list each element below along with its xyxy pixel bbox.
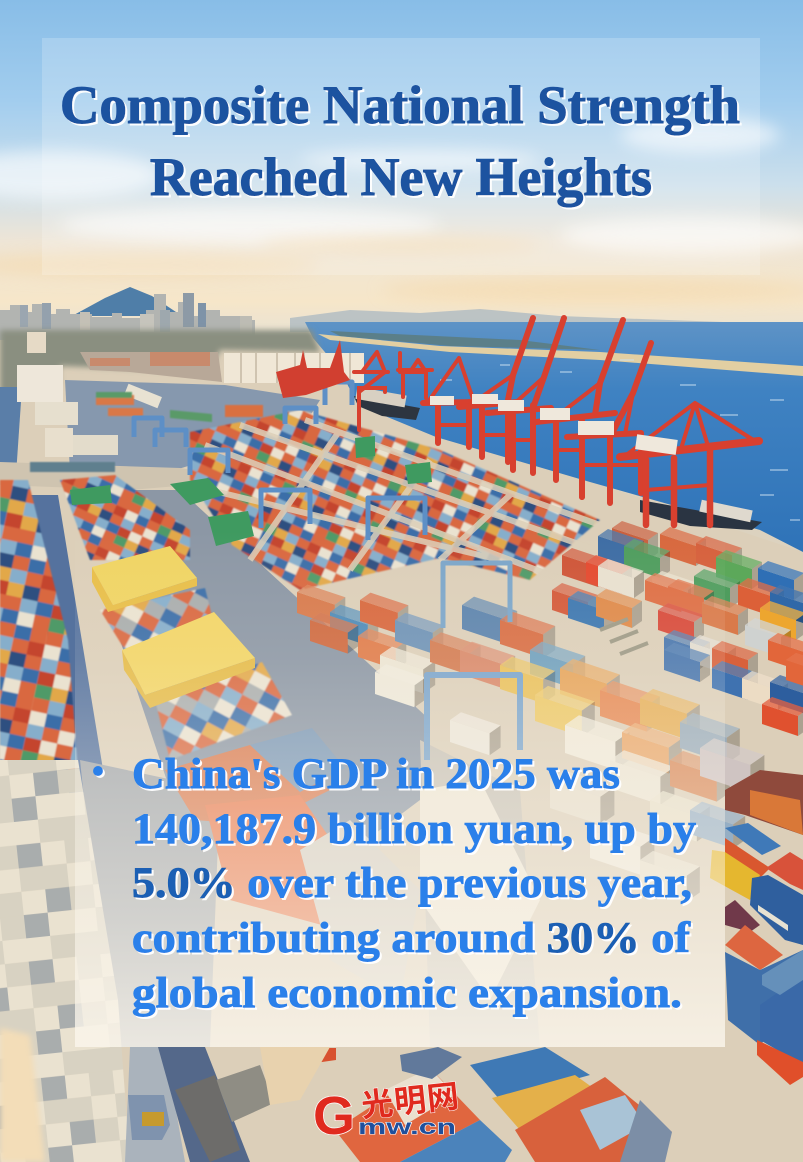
left stacks [60, 475, 292, 760]
title [60, 75, 740, 207]
body text block: China's GDP in 2025 was [132, 751, 620, 798]
blue yard gantries [134, 382, 520, 760]
crane 3 [536, 320, 623, 497]
body text block: 5.0% over the previous year, [132, 860, 692, 907]
city skyline [0, 293, 255, 352]
central containers as individual boxes [297, 585, 764, 902]
lower centre stacks [165, 728, 540, 1000]
panel: title backdrop [42, 38, 760, 275]
red quay cranes [354, 318, 759, 525]
sea wave highlights [440, 360, 800, 520]
crane 5 [459, 318, 533, 462]
road grey asphalt areas [28, 490, 540, 1047]
mountain [72, 287, 182, 316]
parking lines [600, 619, 648, 654]
logo red G: G [313, 1086, 355, 1146]
distant hills [290, 309, 803, 332]
right block containers [552, 521, 803, 736]
body text block [94, 751, 697, 1017]
right edge containers [710, 770, 803, 1085]
sea [305, 322, 803, 552]
harbour buildings [17, 332, 364, 457]
left pale container column [0, 760, 130, 1162]
body text block: 140,187.9 billion yuan, up by [132, 806, 697, 853]
crane 6 [423, 358, 477, 447]
ground [0, 340, 803, 1162]
green containers [70, 436, 432, 546]
crane 4 [487, 318, 564, 473]
clouds [0, 117, 803, 253]
title: Composite National Strength [60, 75, 740, 135]
crane 2 [567, 343, 651, 503]
inland roads [0, 380, 320, 490]
yellow warehouse blocks [92, 546, 255, 708]
left colourful container column [0, 480, 78, 770]
yard clutter at upper left [30, 392, 311, 472]
logo: gmw.cn [313, 1078, 461, 1146]
body text block: contributing around 30% of [132, 915, 691, 962]
crane cabins [430, 394, 678, 455]
container yard upper rows [190, 410, 600, 590]
logo Chinese name: 光明网 [359, 1078, 461, 1124]
crane 1 [620, 403, 759, 525]
bottom centre containers [125, 1047, 672, 1162]
sky [0, 0, 803, 335]
bullet [94, 766, 102, 776]
title: Reached New Heights [150, 147, 652, 207]
far sand spit and tree line [318, 331, 803, 376]
ground lanes between upper rows [205, 420, 610, 590]
moored ships [354, 387, 762, 530]
body text block: global economic expansion. [132, 970, 682, 1017]
city foreground band [0, 330, 320, 395]
red harbour machinery beside silos [276, 340, 350, 398]
panel: text backdrop [75, 530, 725, 1047]
logo domain: mw.cn [358, 1116, 456, 1139]
warm horizon haze [0, 237, 803, 302]
bottom left peach ground patch [0, 1028, 45, 1162]
small distant cranes [354, 352, 432, 430]
